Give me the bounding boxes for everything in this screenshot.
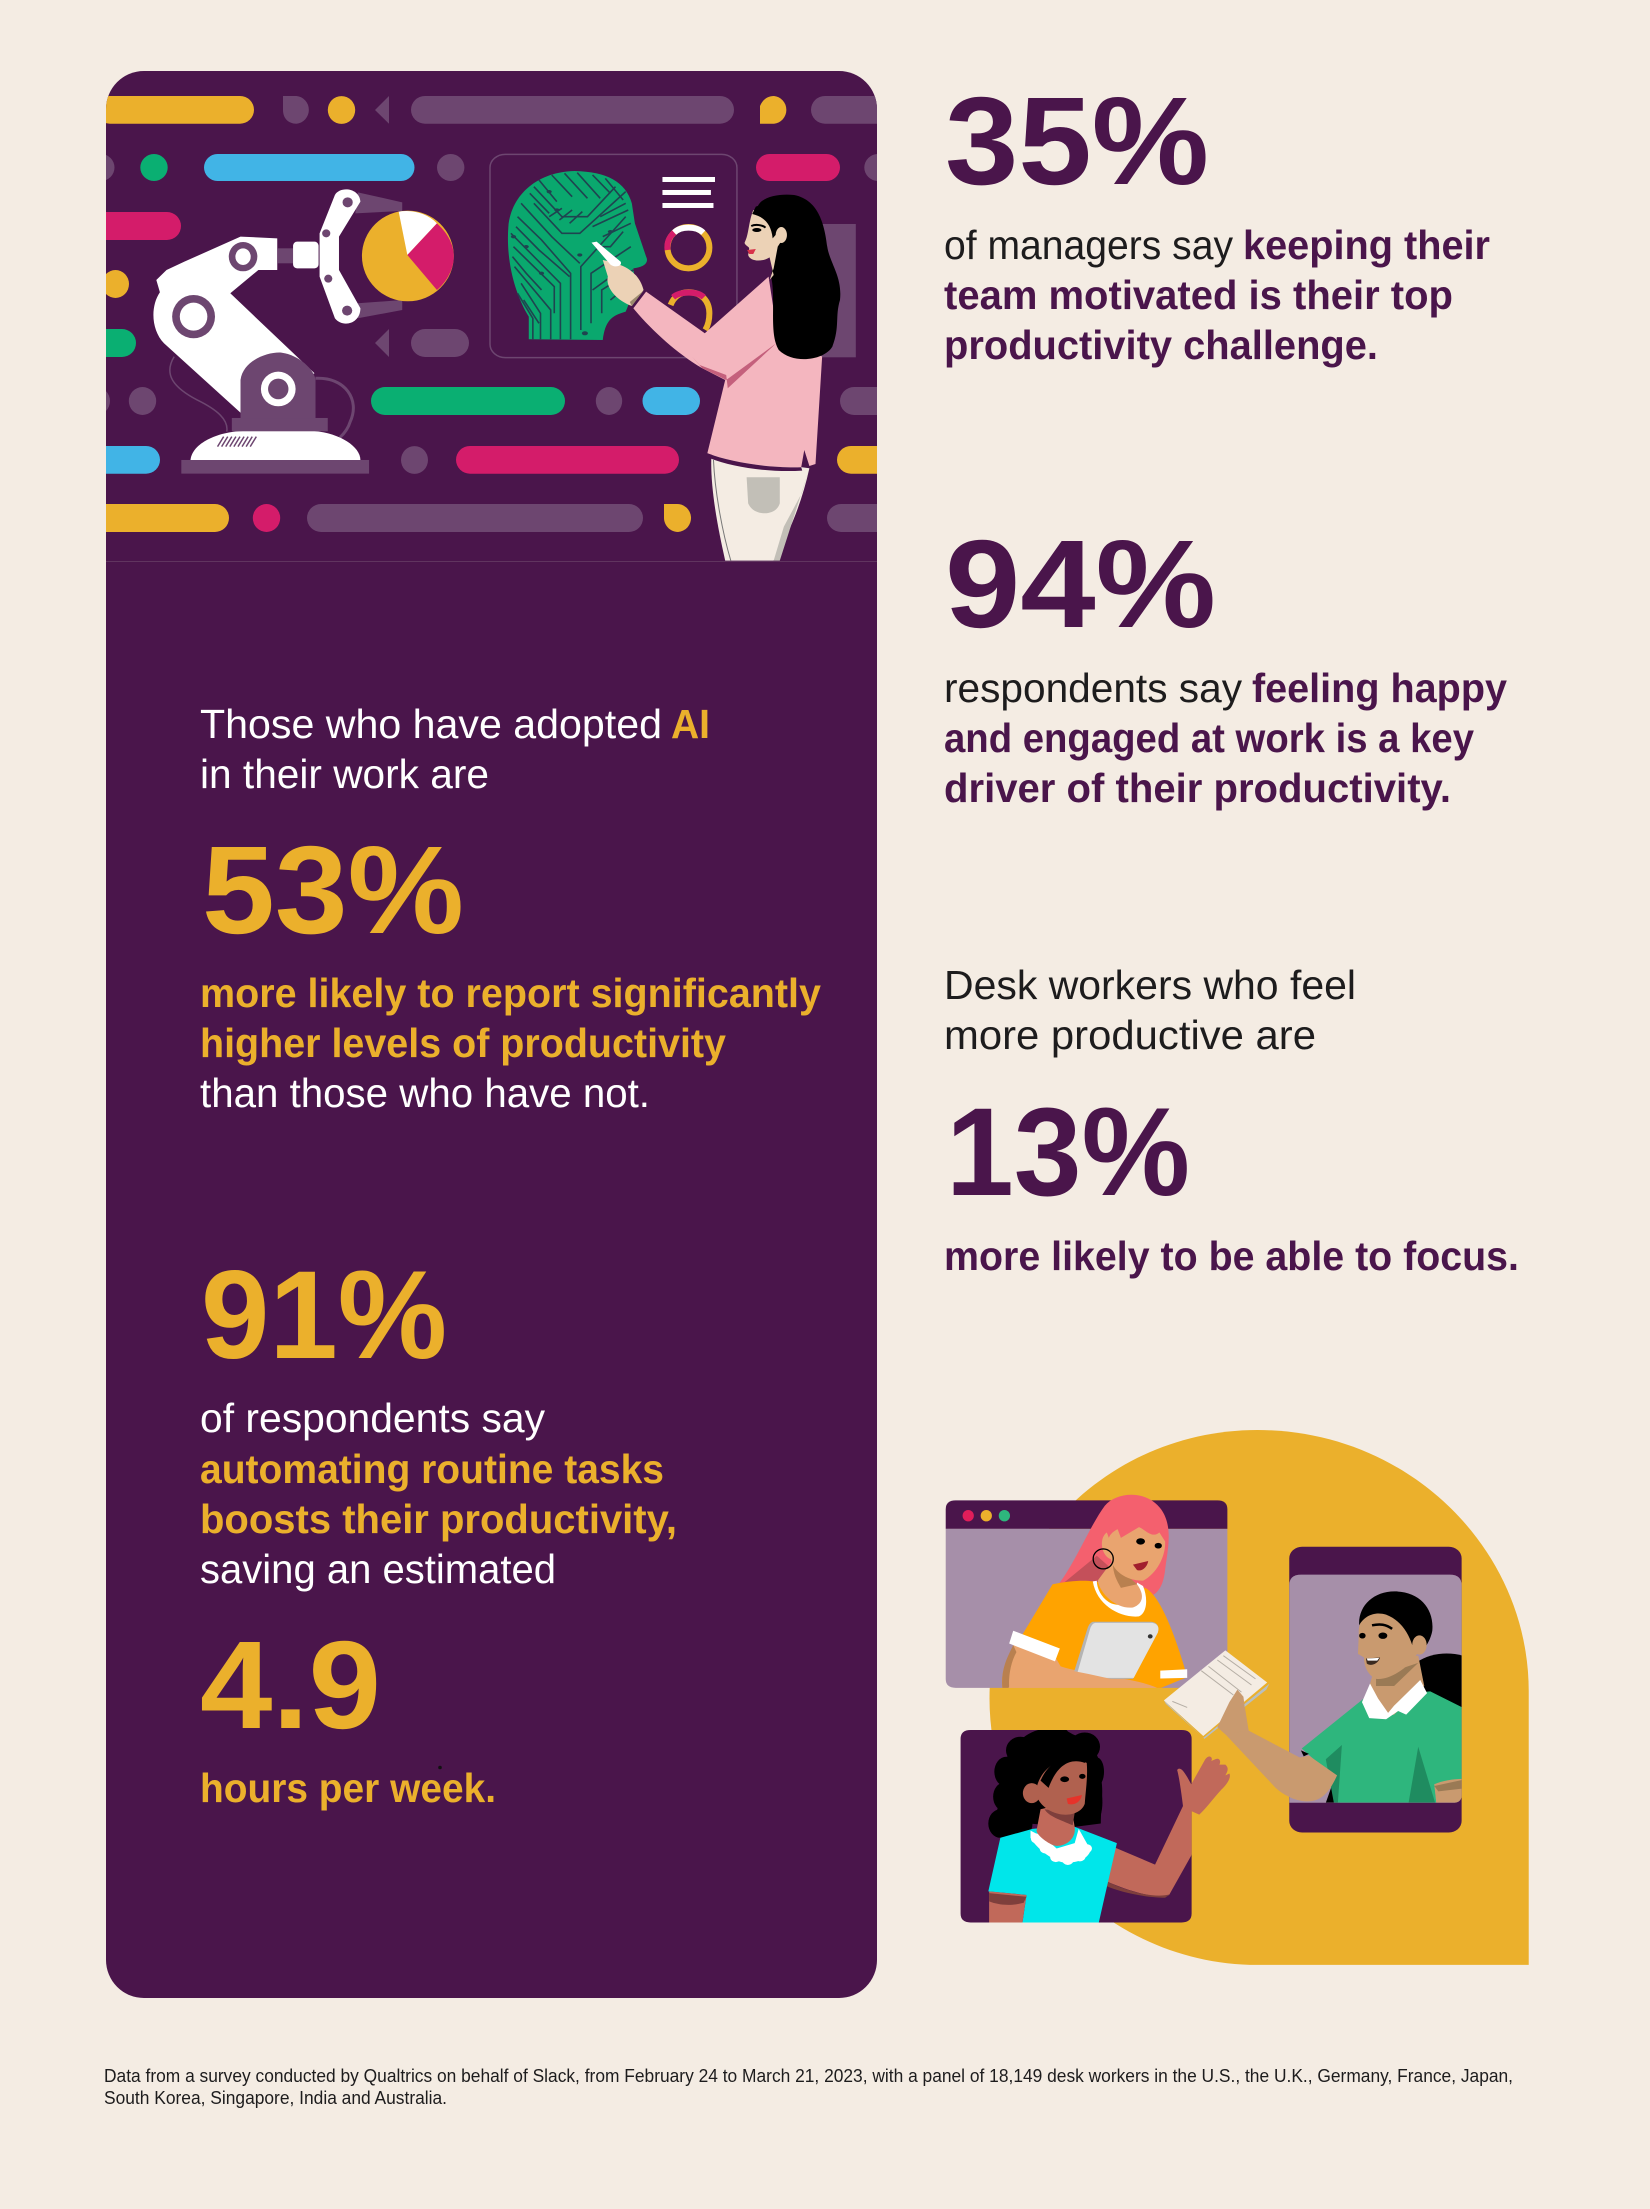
window: phone with man [1217, 1547, 1462, 1832]
shirt [988, 1825, 1117, 1922]
block: automation 91%: saving an estimated [200, 1546, 556, 1592]
block: AI adoption 53%: AI [671, 701, 710, 747]
stat: 13% desk workers: more productive are [944, 1012, 1316, 1058]
stat: 35% managers: of managers say [944, 222, 1233, 268]
robot cables [170, 357, 353, 437]
footnote: Data from a survey conducted by Qualtrics on behalf of Slack, from February 24 to March 21, 2023, with a panel of 18,149 desk workers in the U.S., the U.K., Germany, France, Japan, [104, 2066, 1513, 2086]
robot arm [153, 189, 402, 474]
block: automation 91%: 91% [201, 1246, 447, 1385]
mauve rectangle behind woman [817, 224, 856, 357]
stat: 94% respondents: respondents say [944, 665, 1242, 711]
block: AI adoption 53%: Those who have adopted [200, 701, 662, 747]
window: woman waving [961, 1725, 1230, 1922]
window dots [963, 1510, 1010, 1521]
stat: 94% respondents: feeling happy [1252, 665, 1507, 711]
stat: 13% desk workers: Desk workers who feel [944, 962, 1356, 1008]
footnote [104, 2066, 1513, 2108]
block: automation 91%: boosts their productivity, [200, 1496, 677, 1542]
block: automation 91%: 4.9 [200, 1616, 381, 1755]
block: AI adoption 53%: in their work are [200, 751, 489, 797]
woman [592, 195, 840, 561]
waving hand [1177, 1757, 1230, 1815]
screen list lines [662, 177, 715, 208]
chair back [1416, 1654, 1462, 1709]
neck [1036, 1808, 1075, 1846]
stat: 35% managers: productivity challenge. [944, 322, 1378, 368]
block: AI adoption 53%: higher levels of productivity [200, 1020, 726, 1066]
block: automation 91% [200, 1246, 677, 1811]
pill pattern background [83, 96, 901, 532]
stat: 35% managers: team motivated is their top [944, 272, 1453, 318]
block: automation 91%: hours per week. [200, 1765, 496, 1811]
stat: 13% desk workers: more likely to be able to focus. [944, 1233, 1519, 1279]
stat: 35% managers: 35% [945, 72, 1209, 211]
man arm [1217, 1690, 1337, 1801]
man neck and collar [1367, 1656, 1424, 1716]
woman with pink hair [1002, 1495, 1187, 1688]
robot, screen and woman artwork [153, 154, 856, 561]
face [1036, 1760, 1087, 1815]
window: woman with tablet [946, 1495, 1227, 1688]
block: AI adoption 53%: 53% [202, 821, 464, 960]
man shirt [1302, 1691, 1462, 1803]
stat: 13% desk workers: 13% [946, 1083, 1190, 1222]
block: automation 91%: automating routine tasks [200, 1446, 664, 1492]
block: AI adoption 53%: than those who have not. [200, 1070, 650, 1116]
block: AI adoption 53% [200, 701, 821, 1116]
block: AI adoption 53%: more likely to report significantly [200, 970, 821, 1016]
stat: 94% respondents: 94% [945, 515, 1216, 654]
footnote: South Korea, Singapore, India and Australia. [104, 2088, 447, 2108]
stat: 94% respondents: and engaged at work is a key [944, 715, 1474, 761]
paper document [1164, 1650, 1270, 1739]
icon: circuit head [508, 171, 647, 340]
man head [1358, 1607, 1420, 1679]
donut chart 1 [667, 227, 709, 268]
stat: 94% respondents: driver of their productivity. [944, 765, 1451, 811]
curly hair [988, 1725, 1104, 1838]
block: automation 91%: of respondents say [200, 1395, 545, 1441]
illustration: remote team video call [946, 1430, 1529, 1965]
yellow arch [990, 1430, 1529, 1965]
stat: 94% respondents [944, 515, 1507, 811]
pie chart [362, 211, 454, 301]
stat: 35% managers [944, 72, 1490, 368]
donut chart 2 [671, 292, 709, 330]
panel: left aubergine card [83, 71, 901, 1998]
divider line under illustration [106, 561, 877, 562]
stat: 35% managers: keeping their [1243, 222, 1490, 268]
infographic canvas [104, 71, 1529, 2108]
screen outline [490, 154, 737, 358]
waving woman's arm [1108, 1806, 1192, 1896]
illustration: robot arm and woman at AI screen [83, 96, 901, 563]
scalloped collar [1030, 1829, 1092, 1865]
stat: 13% desk workers [944, 962, 1519, 1279]
